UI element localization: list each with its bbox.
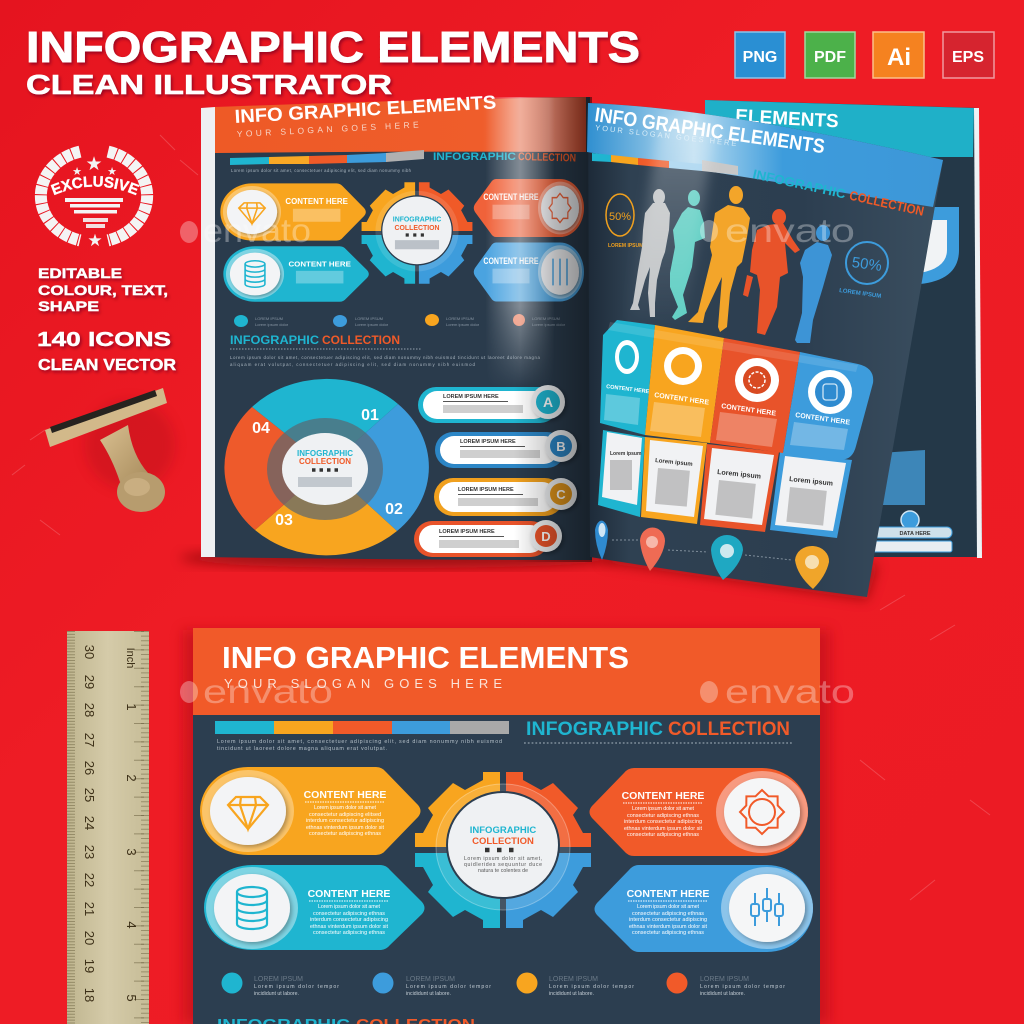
bottom legend: LOREM IPSUM	[406, 976, 455, 983]
bottom legend: LOREM IPSUM	[549, 976, 598, 983]
left page pill C: LOREM IPSUM HERE	[458, 487, 514, 493]
left page second heading: aliquam erat volutpat, consectetuer adipiscing elit, sed diam nonummy nibh euismod	[230, 362, 476, 367]
left page pill A	[418, 385, 565, 423]
left page pie chart	[224, 379, 429, 555]
bottom legend: Lorem ipsum dolor tempor	[406, 984, 491, 990]
left page pie chart: COLLECTION	[299, 457, 351, 466]
ruler numbers: 2	[124, 774, 139, 782]
bottom sheet: YOUR SLOGAN GOES HERE	[224, 676, 502, 691]
badge: PDF	[805, 32, 855, 78]
stamp illustration	[45, 388, 175, 512]
right page percent: blue: LOREM IPSUM	[839, 288, 881, 300]
watermark top right: envato	[725, 212, 855, 249]
left page gear: COLLECTION	[395, 225, 439, 232]
ruler numbers	[82, 645, 139, 1002]
bottom collection heading: INFOGRAPHIC	[526, 718, 663, 740]
left page second heading: INFOGRAPHIC	[230, 335, 319, 347]
exclusive badge: ★	[85, 154, 103, 175]
band labels: CONTENT HERE	[654, 392, 710, 407]
left page hex: yellow: CONTENT HERE	[285, 197, 348, 206]
bottom hex: cyan: Lorem ipsum dolor sit amet	[318, 904, 380, 910]
bottom legend: incididunt ut labore.	[254, 991, 299, 997]
bottom hex: cyan	[204, 865, 424, 950]
ruler numbers: 20	[82, 931, 97, 945]
exclusive badge	[34, 146, 154, 250]
feature text: 140 ICONS	[37, 329, 171, 351]
bottom intro text: Lorem ipsum dolor sit amet, consectetuer adipiscing elit, sed diam nonummy nibh euismod	[217, 739, 502, 745]
left page second heading: Lorem ipsum dolor sit amet, consectetuer adipiscing elit, sed diam nonummy nibh euismod tincidunt ut laoreet dolore magna	[230, 355, 541, 360]
main title: CLEAN ILLUSTRATOR	[26, 69, 392, 100]
back page shield	[920, 207, 959, 284]
bottom intro text	[217, 739, 502, 752]
card cyan: Lorem ipsum	[610, 451, 642, 457]
bottom colour bar	[215, 721, 509, 734]
bottom hex: yellow: ethnas vinterdum ipsum dolor sit	[306, 825, 384, 831]
right page colour bar	[592, 153, 738, 175]
back page data node	[870, 511, 952, 552]
ruler numbers: 21	[82, 902, 97, 916]
band icon orange	[735, 358, 779, 402]
right page colour band	[600, 320, 873, 459]
left page pill A: A	[543, 394, 553, 410]
left page legend: LOREM IPSUM	[446, 316, 474, 321]
main title	[26, 23, 640, 100]
left page collection heading: COLLECTION	[518, 151, 576, 165]
silhouette: yellow	[688, 186, 750, 332]
left page header	[215, 97, 586, 153]
magazine left page: YOUR SLOGAN GOES HERE	[237, 119, 419, 139]
left page pill B: B	[556, 439, 566, 454]
right page percent: blue: 50%	[851, 254, 883, 275]
left page second heading	[230, 335, 541, 367]
band icon blue	[808, 370, 852, 414]
left page hex: cyan: CONTENT HERE	[288, 260, 351, 268]
bottom hex: cyan: ethnas vinterdum ipsum dolor sit	[310, 924, 388, 930]
bottom legend: incididunt ut labore.	[700, 991, 745, 997]
watermark bottom left: envato	[203, 673, 333, 710]
bottom hex: orange: CONTENT HERE	[622, 790, 704, 802]
magazine back page: ELEMENTS	[735, 106, 839, 132]
left page hex: cyan	[223, 246, 369, 302]
left page pill B: LOREM IPSUM HERE	[460, 439, 516, 445]
ruler numbers: 3	[124, 848, 139, 856]
bottom legend: Lorem ipsum dolor tempor	[549, 984, 634, 990]
bottom gear: Lorem ipsum dolor sit amet,	[464, 856, 542, 862]
bottom hex: blue: ethnas vinterdum ipsum dolor sit	[629, 924, 708, 930]
band labels: CONTENT HERE	[795, 412, 851, 427]
bottom legend: LOREM IPSUM	[254, 976, 303, 983]
bottom hex: yellow: CONTENT HERE	[304, 789, 386, 801]
pin yellow	[795, 546, 829, 589]
ruler numbers: 27	[82, 733, 97, 747]
bottom gear: INFOGRAPHIC	[470, 825, 536, 836]
silhouette: blue	[795, 225, 832, 343]
exclusive badge: ★	[107, 166, 117, 178]
ruler numbers: 18	[82, 988, 97, 1002]
ruler numbers: Inch	[124, 648, 136, 668]
right page cards	[598, 430, 852, 538]
bottom hex: orange: ethnas vinterdum ipsum dolor sit	[624, 826, 702, 832]
ruler numbers: 24	[82, 816, 97, 830]
left page pie chart: 03	[275, 512, 293, 529]
left page legend: LOREM IPSUM	[532, 316, 560, 321]
bottom sheet header	[193, 628, 820, 715]
left page pill C: C	[556, 487, 566, 502]
left page pie chart: INFOGRAPHIC	[297, 449, 353, 458]
bottom hex: orange	[590, 768, 808, 856]
bottom intro text: tincidunt ut laoreet dolore magna aliquam erat volutpat.	[217, 746, 387, 752]
ruler numbers: 28	[82, 703, 97, 717]
card cyan	[598, 430, 645, 517]
left page hex: orange	[474, 179, 584, 237]
bottom hex: yellow: consectetur adipiscing elitsed	[309, 812, 381, 818]
band icon yellow	[664, 347, 702, 385]
bottom legend: Lorem ipsum dolor tempor	[700, 984, 785, 990]
ruler numbers: 23	[82, 845, 97, 859]
bottom legend	[222, 972, 785, 997]
card blue	[770, 452, 852, 538]
bottom hex: blue: Lorem ipsum dolor sit amet	[637, 904, 700, 910]
left page pie chart: 02	[385, 501, 403, 518]
bottom gear: COLLECTION	[472, 836, 534, 847]
silhouette: orange	[743, 209, 800, 335]
left page legend: Lorem ipsum dolor	[355, 322, 389, 327]
bottom hex: blue: consectetur adipiscing ethnas	[632, 911, 704, 917]
bottom gear	[415, 772, 591, 928]
left page hex: blue: CONTENT HERE	[483, 256, 539, 266]
left page collection heading: INFOGRAPHIC	[433, 151, 516, 163]
ruler numbers: 19	[82, 959, 97, 973]
pin orange	[640, 527, 665, 571]
left page hex: blue	[474, 243, 584, 301]
card orange: Lorem ipsum	[717, 469, 761, 481]
card yellow	[641, 437, 707, 524]
main title: INFOGRAPHIC ELEMENTS	[26, 23, 640, 72]
bottom hex: blue: consectetur adipiscing ethnas	[632, 930, 704, 936]
watermark top right	[700, 212, 855, 249]
bottom legend: LOREM IPSUM	[700, 976, 749, 983]
badge: PNG	[735, 32, 785, 78]
badge: Ai	[873, 32, 924, 78]
left page pill C	[434, 478, 577, 516]
bottom hex: orange: consectetur adipiscing ethnas	[627, 832, 699, 838]
badge: PNG: PNG	[743, 49, 777, 66]
pin blue	[595, 521, 608, 560]
envato watermarks	[180, 212, 855, 710]
left page gear	[362, 182, 472, 284]
bottom gear: natura te colentes de	[478, 868, 528, 874]
left page pie chart: 01	[361, 407, 379, 424]
magazine left page: INFO GRAPHIC ELEMENTS	[234, 92, 497, 128]
ruler numbers: 4	[124, 921, 139, 929]
feature text: SHAPE	[38, 298, 99, 314]
bottom hex: yellow: Lorem ipsum dolor sit amet	[314, 805, 376, 811]
bottom hex: cyan: interdum consectetur adipiscing	[310, 917, 388, 923]
band labels	[606, 384, 851, 427]
bottom hex: blue	[594, 865, 813, 952]
bottom legend: incididunt ut labore.	[549, 991, 594, 997]
bottom hex: blue: CONTENT HERE	[627, 888, 709, 900]
card yellow: Lorem ipsum	[655, 458, 693, 468]
right page percent: blue	[839, 242, 888, 300]
badge: EPS	[943, 32, 994, 78]
watermark bottom right: envato	[725, 673, 855, 710]
left page pill D: D	[541, 529, 551, 544]
back page blue box	[878, 450, 925, 505]
magazine back page	[705, 100, 982, 558]
badge: PDF: PDF	[814, 49, 846, 66]
bottom hex: orange: Lorem ipsum dolor sit amet	[632, 806, 694, 812]
right page collection heading: INFOGRAPHIC	[751, 166, 848, 202]
left page legend: Lorem ipsum dolor	[255, 322, 289, 327]
right page percent: yellow: LOREM IPSUM	[608, 243, 643, 249]
left page collection heading	[433, 151, 576, 165]
left page pie chart: 04	[252, 420, 270, 437]
silhouette: teal	[670, 190, 705, 320]
badge: EPS: EPS	[952, 49, 984, 66]
bottom hex: blue: interdum consectetur adipiscing	[629, 917, 707, 923]
right page header	[587, 103, 943, 207]
bottom second heading	[217, 1017, 475, 1024]
left page colour bar	[230, 150, 424, 165]
right page percent: yellow: 50%	[609, 211, 631, 223]
bottom hex: yellow	[200, 767, 420, 855]
badge: Ai: Ai	[887, 44, 911, 71]
ruler numbers: 26	[82, 761, 97, 775]
ruler numbers: 29	[82, 675, 97, 689]
right page collection heading	[751, 166, 925, 219]
left page pill A: LOREM IPSUM HERE	[443, 394, 499, 400]
bottom gear: quidlerides sequuntur duce	[464, 862, 542, 868]
left page hex: yellow	[220, 183, 366, 241]
exclusive badge: EXCLUSIVE	[50, 176, 140, 196]
silhouette: grey	[630, 189, 670, 317]
magazine right page	[587, 103, 943, 600]
bottom collection heading	[524, 718, 793, 743]
bottom legend: Lorem ipsum dolor tempor	[254, 984, 339, 990]
watermark top left: envato	[203, 212, 311, 249]
bottom legend: incididunt ut labore.	[406, 991, 451, 997]
exclusive badge: ★	[72, 166, 82, 178]
right page collection heading: COLLECTION	[848, 188, 925, 219]
magazine right page: YOUR SLOGAN GOES HERE	[595, 123, 737, 148]
bottom hex: orange: consectetur adipiscing ethnas	[627, 813, 699, 819]
map pins	[595, 521, 829, 589]
bottom hex: orange: interdum consectetur adipiscing	[624, 819, 702, 825]
format badges	[735, 32, 994, 78]
exclusive badge: ★	[87, 231, 103, 250]
bottom hex: yellow: interdum consectetur adipiscing	[306, 818, 384, 824]
back page data node: DATA HERE	[899, 531, 931, 537]
card blue: Lorem ipsum	[789, 476, 833, 488]
band labels: CONTENT HERE	[721, 403, 777, 418]
watermark bottom right	[700, 673, 855, 710]
card orange	[700, 444, 779, 532]
left page second heading: COLLECTION	[322, 335, 400, 347]
left page legend	[234, 314, 566, 327]
ruler numbers: 25	[82, 788, 97, 802]
ruler numbers: 30	[82, 645, 97, 659]
feature text: CLEAN VECTOR	[38, 357, 176, 374]
band icon cyan	[615, 340, 639, 374]
left page pill D	[414, 520, 562, 557]
magazine left page	[180, 92, 620, 568]
left page small text: Lorem ipsum dolor sit amet, consectetuer adipiscing elit, sed diam nonummy nibh	[231, 168, 412, 173]
ruler numbers: 22	[82, 873, 97, 887]
magazine right page: INFO GRAPHIC ELEMENTS	[593, 104, 826, 158]
left page pill B	[435, 430, 577, 468]
ruler numbers: 1	[124, 703, 139, 711]
left page pill D: LOREM IPSUM HERE	[439, 529, 495, 535]
left page legend: Lorem ipsum dolor	[446, 322, 480, 327]
bottom collection heading: COLLECTION	[668, 718, 790, 740]
band labels: CONTENT HERE	[606, 384, 650, 395]
bottom hex: cyan: consectetur adipiscing ethnas	[313, 911, 385, 917]
ruler	[67, 631, 149, 1024]
left page legend: LOREM IPSUM	[355, 316, 383, 321]
feature text: COLOUR, TEXT,	[38, 282, 168, 298]
left page gear: INFOGRAPHIC	[393, 216, 441, 223]
left page hex: orange: CONTENT HERE	[483, 192, 539, 202]
feature text	[37, 265, 176, 374]
watermark bottom left	[180, 673, 333, 710]
bottom sheet	[183, 628, 830, 1024]
ruler numbers: 5	[124, 994, 139, 1002]
bottom hex: cyan: CONTENT HERE	[308, 888, 390, 900]
pin teal	[711, 535, 743, 580]
bottom sheet: INFO GRAPHIC ELEMENTS	[222, 640, 629, 675]
feature text: EDITABLE	[38, 265, 122, 281]
left page legend: LOREM IPSUM	[255, 316, 283, 321]
left page legend: Lorem ipsum dolor	[532, 322, 566, 327]
right page percent: yellow	[606, 194, 643, 249]
bottom hex: cyan: consectetur adipiscing ethnas	[313, 930, 385, 936]
bottom hex: yellow: consectetur adipiscing ethnas	[309, 831, 381, 837]
